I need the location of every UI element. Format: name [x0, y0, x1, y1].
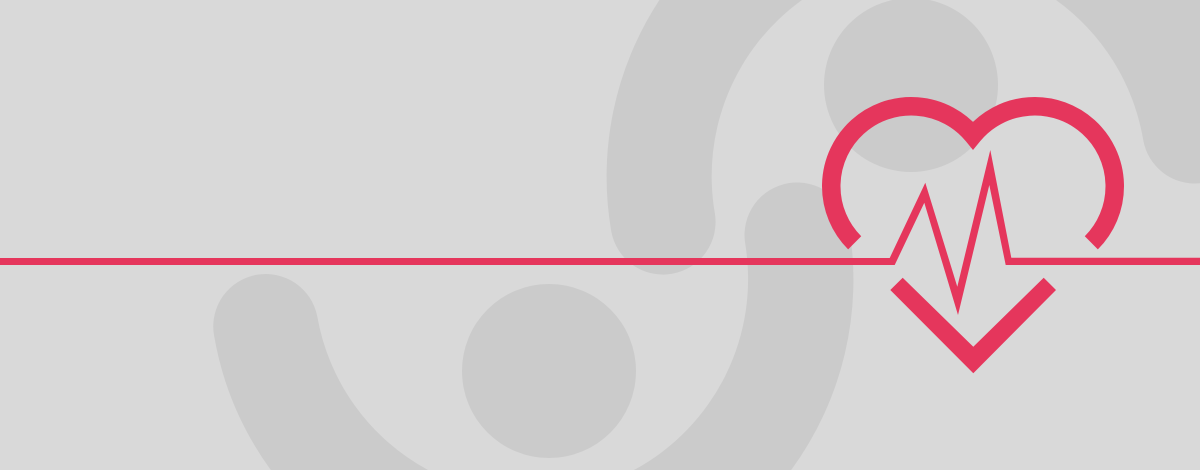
- heart bottom chevron: [890, 278, 1056, 373]
- background logo motif: upper: [607, 0, 1200, 275]
- background logo motif: lower: [213, 182, 853, 470]
- upper left arc: [607, 0, 802, 275]
- heart top arcs: [831, 106, 1115, 243]
- lower circle: [462, 284, 636, 458]
- pulse line: [0, 150, 1200, 315]
- upper right arc: [1056, 0, 1200, 184]
- icon: heart with pulse: [0, 106, 1200, 373]
- upper circle: [824, 0, 998, 172]
- lower smile arc: [213, 182, 853, 470]
